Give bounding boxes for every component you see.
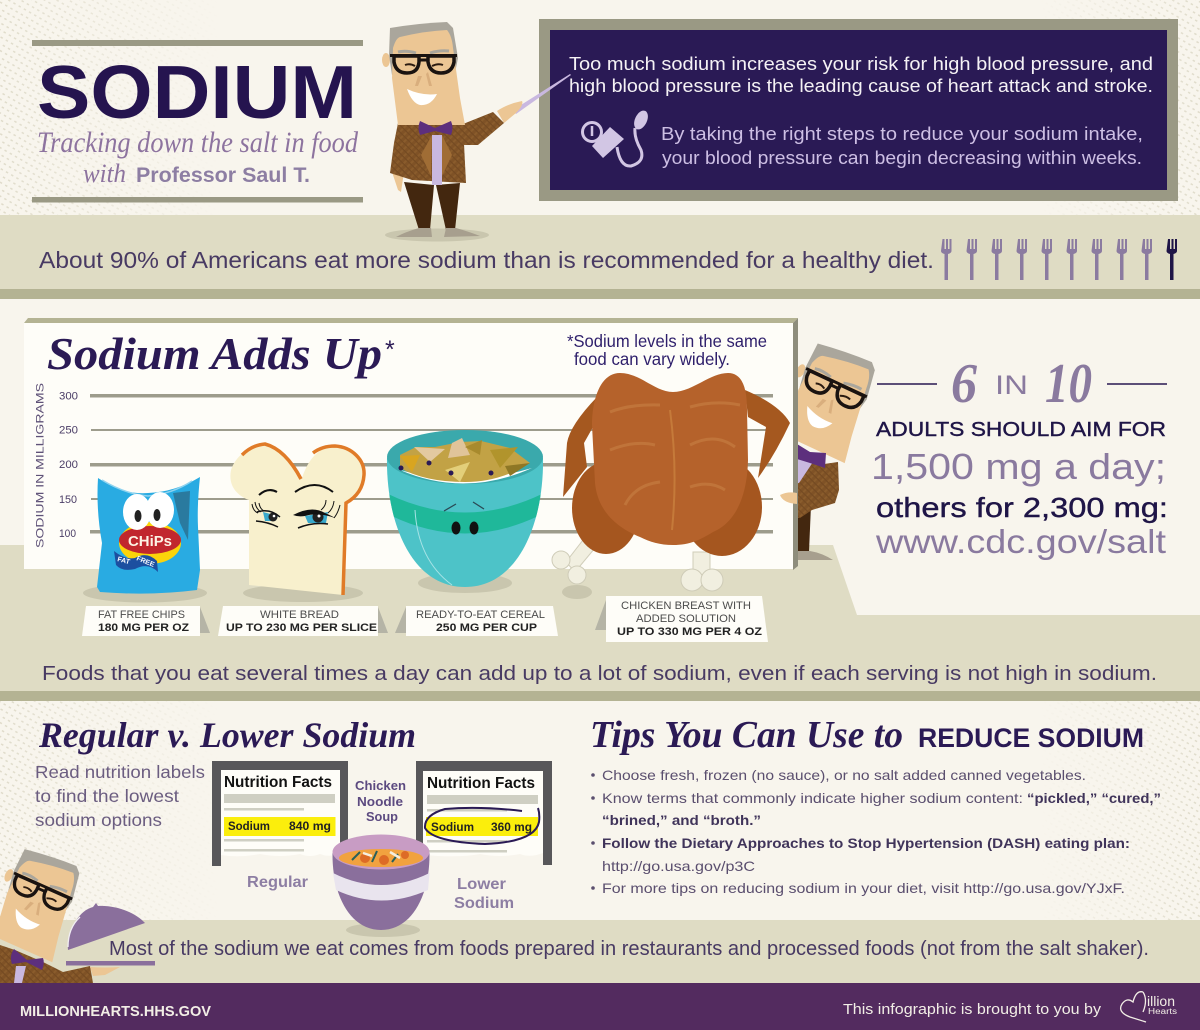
- callout: 6 in 10 adults: www.cdc.gov/salt: [875, 523, 1166, 560]
- callout: 6 in 10 adults: IN: [995, 370, 1028, 400]
- label: chicken breast: [595, 596, 768, 642]
- subtitle: Tracking down the salt in food: [37, 126, 359, 159]
- heading: regular v lower sodium: Regular v. Lower Sodium: [38, 715, 416, 755]
- icon row: ten forks: [941, 239, 1177, 280]
- y axis values: 200: [59, 459, 78, 471]
- text: lower sodium caption: Lower: [457, 876, 506, 893]
- text: chicken noodle soup: [355, 778, 406, 824]
- byline: with: [83, 159, 126, 188]
- text: chicken noodle soup: Noodle: [357, 794, 403, 809]
- professor with serving cloche: [0, 841, 155, 983]
- footnote: [567, 331, 767, 369]
- y axis values: 150: [59, 494, 77, 506]
- list: tips: “brined,” and “broth.”: [602, 813, 761, 828]
- callout: 6 in 10 adults: 10: [1045, 353, 1092, 415]
- title block: [32, 40, 363, 202]
- list: tips: [591, 768, 1161, 896]
- byline: Professor Saul T.: [136, 164, 310, 187]
- eyes: [252, 485, 340, 528]
- heading: tips: Tips You Can Use to: [590, 714, 903, 756]
- byline: [83, 159, 310, 188]
- y axis title: SODIUM IN MILLIGRAMS: [34, 383, 46, 548]
- list: tips: “pickled,” “cured,”: [1027, 791, 1161, 806]
- text: chicken noodle soup: Chicken: [355, 778, 406, 793]
- food: chips bag: [83, 477, 207, 602]
- list: tips: Know terms that commonly indicate higher sodium content:: [602, 791, 1023, 806]
- food: white bread: [230, 444, 365, 602]
- icon: soup bowl: [332, 834, 430, 937]
- cereal flakes: [398, 438, 530, 482]
- y axis values: 300: [59, 390, 78, 402]
- callout: 6 in 10 adults: others for 2,300 mg:: [876, 492, 1168, 523]
- nutrition label: regular: Nutrition Facts: [224, 774, 332, 791]
- text: lower sodium caption: [454, 876, 514, 912]
- list: tips: Choose fresh, frozen (no sauce), or no salt added canned vegetables.: [602, 768, 1086, 783]
- label: fat free chips: FAT FREE CHIPS: [98, 609, 185, 621]
- fat free text: [116, 555, 155, 569]
- statistic: 90 percent of Americans: About 90% of Americans eat more sodium than is recommended for a healthy diet.: [39, 247, 934, 273]
- nutrition label: regular: Sodium: [228, 821, 270, 833]
- heading: tips: REDUCE SODIUM: [918, 723, 1144, 753]
- fat free text: FREE: [135, 555, 155, 569]
- footnote: food can vary widely.: [574, 349, 730, 369]
- label: cereal: 250 MG PER CUP: [436, 622, 537, 634]
- heading: tips: [590, 714, 1144, 756]
- text: read nutrition labels: Read nutrition labels: [35, 762, 205, 782]
- nutrition label: lower sodium: Nutrition Facts: [427, 775, 535, 792]
- panel: sodium adds up chart: [24, 318, 798, 570]
- callout: 6 in 10 adults: ADULTS SHOULD AIM FOR: [876, 418, 1166, 441]
- text: read nutrition labels: [35, 762, 205, 830]
- label: white bread: [218, 606, 388, 636]
- label: white bread: UP TO 230 MG PER SLICE: [226, 622, 377, 634]
- footnote: *Sodium levels in the same: [567, 331, 767, 351]
- fat free text: FAT: [116, 556, 131, 566]
- nutrition label: regular: 840 mg: [289, 821, 331, 833]
- logo: million hearts: Hearts: [1148, 1007, 1177, 1016]
- text: right steps: By taking the right steps to reduce your sodium intake,: [661, 124, 1143, 144]
- list: tips: For more tips on reducing sodium in your diet, visit http://go.usa.gov/YJxF.: [602, 881, 1125, 896]
- nutrition label: regular: [212, 761, 348, 866]
- y axis values: 100: [59, 528, 76, 540]
- list: tips: Follow the Dietary Approaches to Stop Hypertension (DASH) eating plan:: [602, 836, 1130, 851]
- list: tips: http://go.usa.gov/p3C: [602, 859, 755, 874]
- text: lower sodium caption: Sodium: [454, 895, 514, 912]
- nutrition label: lower sodium: Sodium: [431, 822, 474, 834]
- label: cereal: [395, 606, 558, 636]
- label: cereal: READY-TO-EAT CEREAL: [416, 609, 545, 621]
- chips logo text: CHiPs: [128, 534, 172, 550]
- text: sodium risk: Too much sodium increases your risk for high blood pressure, and: [569, 54, 1153, 74]
- label: chicken breast: CHICKEN BREAST WITH: [621, 600, 751, 612]
- bottom band: [0, 920, 1200, 983]
- callout: 6 in 10 adults: 6: [951, 353, 977, 415]
- text: chicken noodle soup: Soup: [366, 809, 398, 824]
- nutrition label: lower sodium: 360 mg: [491, 822, 532, 834]
- icon: blood pressure cuff: [582, 108, 651, 166]
- label: chicken breast: UP TO 330 MG PER 4 OZ: [617, 626, 762, 638]
- nutrition label: lower sodium: [416, 761, 552, 865]
- label: chicken breast: ADDED SOLUTION: [636, 613, 736, 625]
- floor band: [0, 545, 1200, 701]
- logo: million hearts: illion: [1147, 993, 1175, 1009]
- text: right steps: your blood pressure can begin decreasing within weeks.: [662, 148, 1142, 168]
- footer: [0, 983, 1200, 1030]
- panel: blood pressure message: [539, 19, 1178, 201]
- y axis values: [59, 390, 78, 540]
- logo: million hearts: [1121, 992, 1177, 1022]
- y axis values: 250: [59, 424, 78, 436]
- professor peeking from behind the chart: [769, 335, 888, 560]
- callout: 6 in 10 adults: [871, 353, 1168, 560]
- text: read nutrition labels: sodium options: [35, 810, 162, 830]
- footer credit: This infographic is brought to you by: [843, 1002, 1102, 1018]
- text: sodium risk: high blood pressure is the leading cause of heart attack and stroke.: [569, 76, 1153, 96]
- text: sodium risk: [569, 54, 1153, 96]
- chart heading: Sodium Adds Up: [47, 329, 382, 379]
- text: regular caption: Regular: [247, 874, 308, 891]
- text: read nutrition labels: to find the lowest: [35, 786, 179, 806]
- callout: 6 in 10 adults: 1,500 mg a day;: [871, 446, 1166, 487]
- professor pointing: [382, 22, 571, 242]
- title: SODIUM: [37, 50, 357, 134]
- top band: [0, 215, 1200, 299]
- label: fat free chips: 180 MG PER OZ: [98, 622, 189, 634]
- text: right steps: [661, 124, 1143, 168]
- footer url: MILLIONHEARTS.HHS.GOV: [20, 1003, 211, 1020]
- chart heading: *: [385, 336, 395, 364]
- food: roast chicken: [552, 373, 790, 599]
- label: fat free chips: [82, 606, 210, 636]
- food: cereal bowl: [380, 430, 550, 593]
- icon: peeking professor hand: [780, 492, 797, 504]
- text: most sodium sources: Most of the sodium we eat comes from foods prepared in restaurants and processed foods (not from the salt shaker).: [109, 937, 1149, 960]
- label: white bread: WHITE BREAD: [260, 609, 339, 621]
- text: foods add up: Foods that you eat several times a day can add up to a lot of sodium, even if each serving is not high in sodium.: [42, 663, 1157, 685]
